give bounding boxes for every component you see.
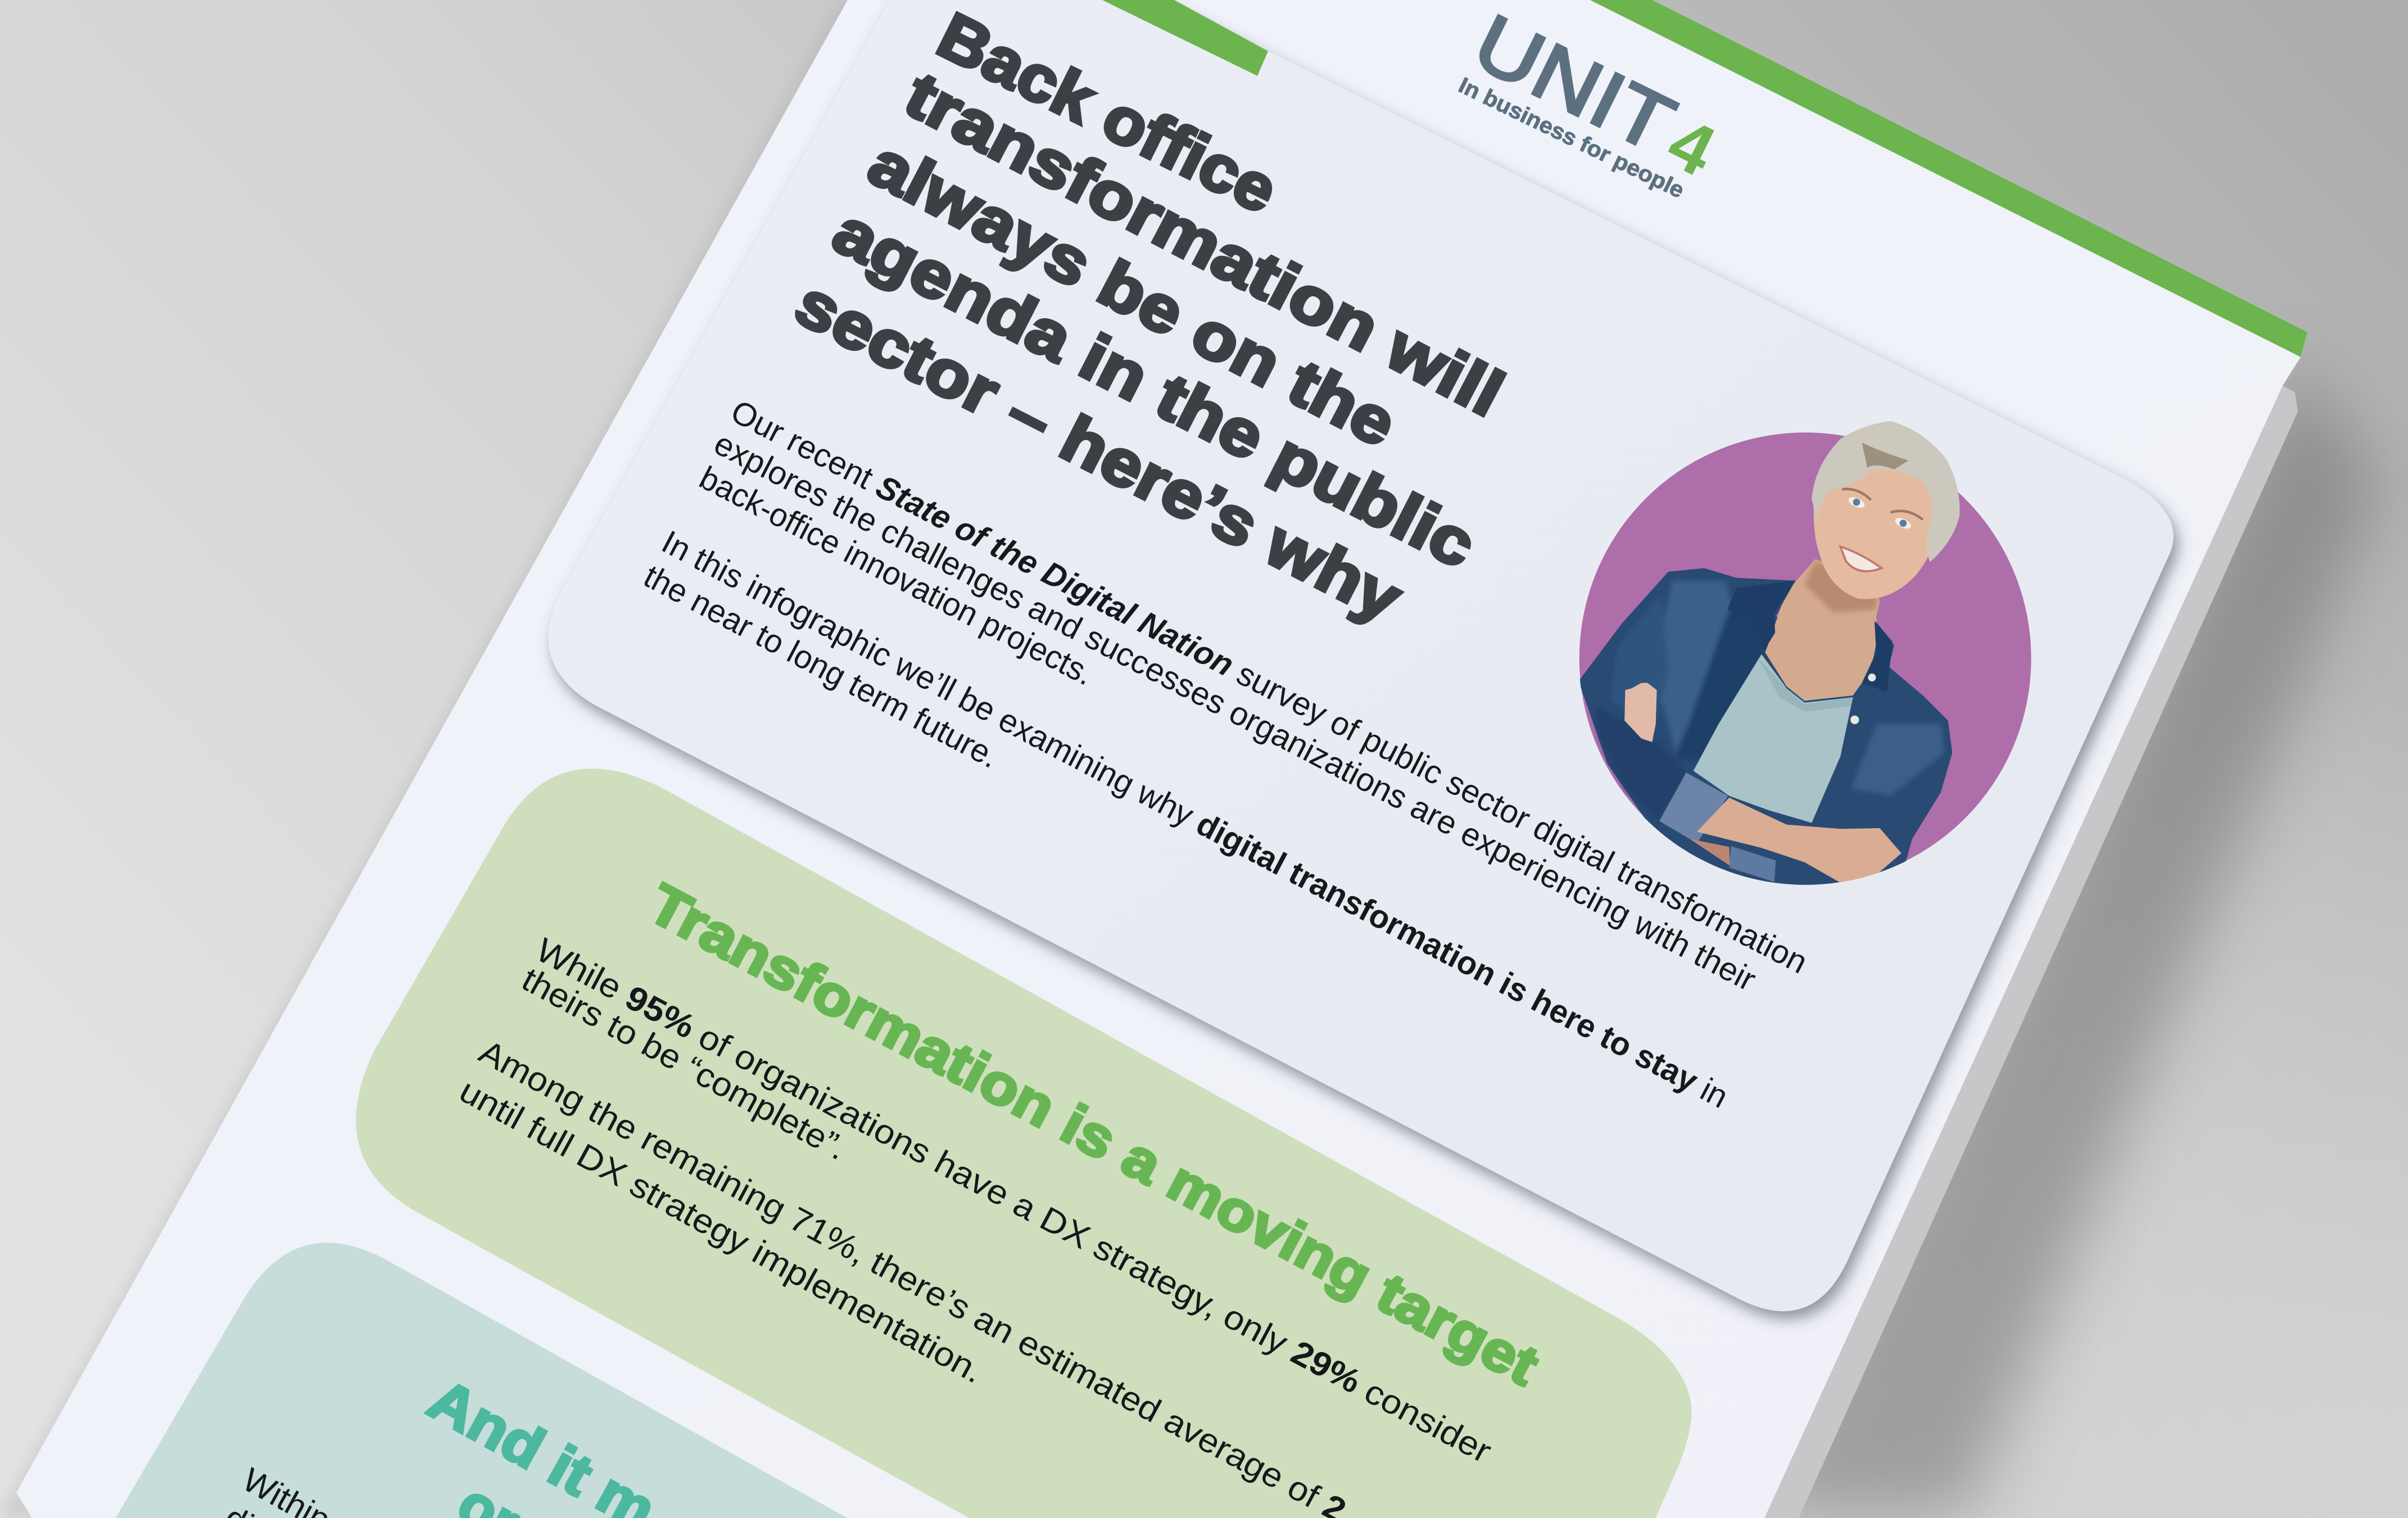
title: transformation will bbox=[894, 57, 1515, 431]
panel: transformation card bbox=[356, 769, 1692, 1518]
title: always be on the bbox=[857, 126, 1408, 461]
top green bar: left strip bbox=[1102, 0, 1268, 76]
left hand bbox=[1624, 683, 1657, 742]
text block: While 95% of organizations have a DX strategy, only 29% consider bbox=[530, 930, 1497, 1470]
neck and chest bbox=[1765, 559, 1880, 701]
back pages: stacked sheets under the document bbox=[1764, 386, 2298, 1518]
title: Back office bbox=[927, 0, 1288, 227]
title bbox=[785, 0, 1515, 635]
heading: Transformation is a moving target bbox=[639, 872, 1549, 1398]
button details bbox=[1868, 674, 1876, 681]
forearm and hand bbox=[1697, 798, 1902, 883]
hair bbox=[1812, 421, 1959, 562]
collars bbox=[1727, 581, 1795, 649]
text block: theirs to be “complete”. bbox=[516, 960, 853, 1167]
text block: intro paragraphs: explores the challenges and successes organizations are experiencing with their bbox=[708, 425, 1762, 999]
under arm bbox=[1690, 839, 1730, 866]
left cuff bbox=[1659, 772, 1728, 843]
t-shirt bbox=[1694, 654, 1853, 823]
text block: intro paragraphs: In this infographic we’ll be examining why digital transformation is here to stay in bbox=[656, 523, 1734, 1115]
eyes bbox=[1847, 495, 1866, 510]
title: agenda in the public bbox=[822, 194, 1487, 582]
denim shading bbox=[1595, 581, 1944, 821]
logo tagline: In business for people bbox=[1455, 73, 1688, 203]
text block: until full DX strategy implementation. bbox=[454, 1072, 990, 1390]
title: sector – here’s why bbox=[785, 266, 1413, 635]
lower cuff bbox=[1729, 846, 1776, 882]
text block: intro paragraphs: back-office innovation projects. bbox=[694, 459, 1099, 693]
panel: intro card bbox=[549, 0, 2174, 1311]
text block: Among the remaining 71%, there’s an estimated average of 2 bbox=[473, 1032, 1352, 1518]
purple circle bbox=[1579, 432, 2031, 884]
panel: teal card bbox=[116, 1243, 847, 1518]
jacket and torso bbox=[1578, 559, 1952, 893]
mouth bbox=[1840, 546, 1882, 571]
text block: intro paragraphs: Our recent State of the Digital Nation survey of public sector digital transformation bbox=[725, 393, 1813, 981]
top green bar: right bbox=[1590, 0, 2307, 357]
text block: intro paragraphs: the near to long term future. bbox=[638, 558, 1005, 775]
portrait: woman on purple circle bbox=[1578, 421, 2031, 893]
eyebrows bbox=[1842, 489, 1923, 519]
logo numeral: 4 bbox=[1656, 102, 1727, 192]
logo wordmark: UNIT bbox=[1460, 0, 1687, 170]
logo: Unit4 bbox=[1455, 0, 1727, 203]
face bbox=[1814, 451, 1938, 599]
